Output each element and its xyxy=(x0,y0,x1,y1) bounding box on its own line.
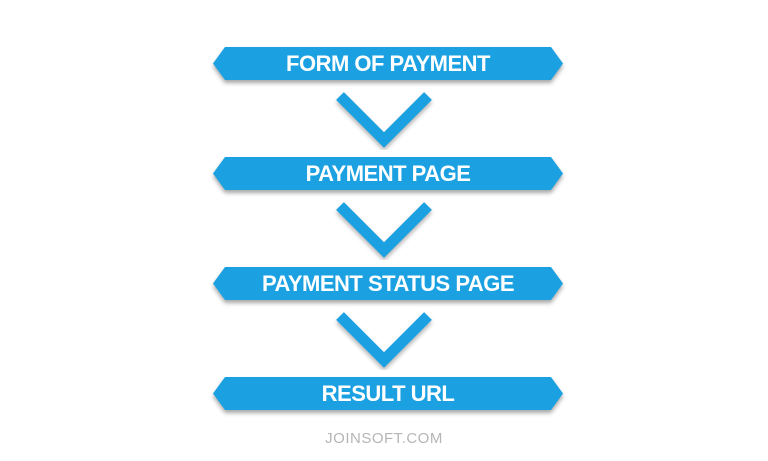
step 1: form of payment: FORM OF PAYMENT xyxy=(286,51,490,76)
step 2: payment page: PAYMENT PAGE xyxy=(306,161,470,186)
arrow 1 xyxy=(335,92,433,150)
arrow 3 xyxy=(335,312,433,370)
arrow 2 xyxy=(335,202,433,260)
footer: site name: JOINSOFT.COM xyxy=(325,430,443,447)
step 3: payment status page: PAYMENT STATUS PAGE xyxy=(262,271,514,296)
step 4: result url: RESULT URL xyxy=(322,381,454,406)
